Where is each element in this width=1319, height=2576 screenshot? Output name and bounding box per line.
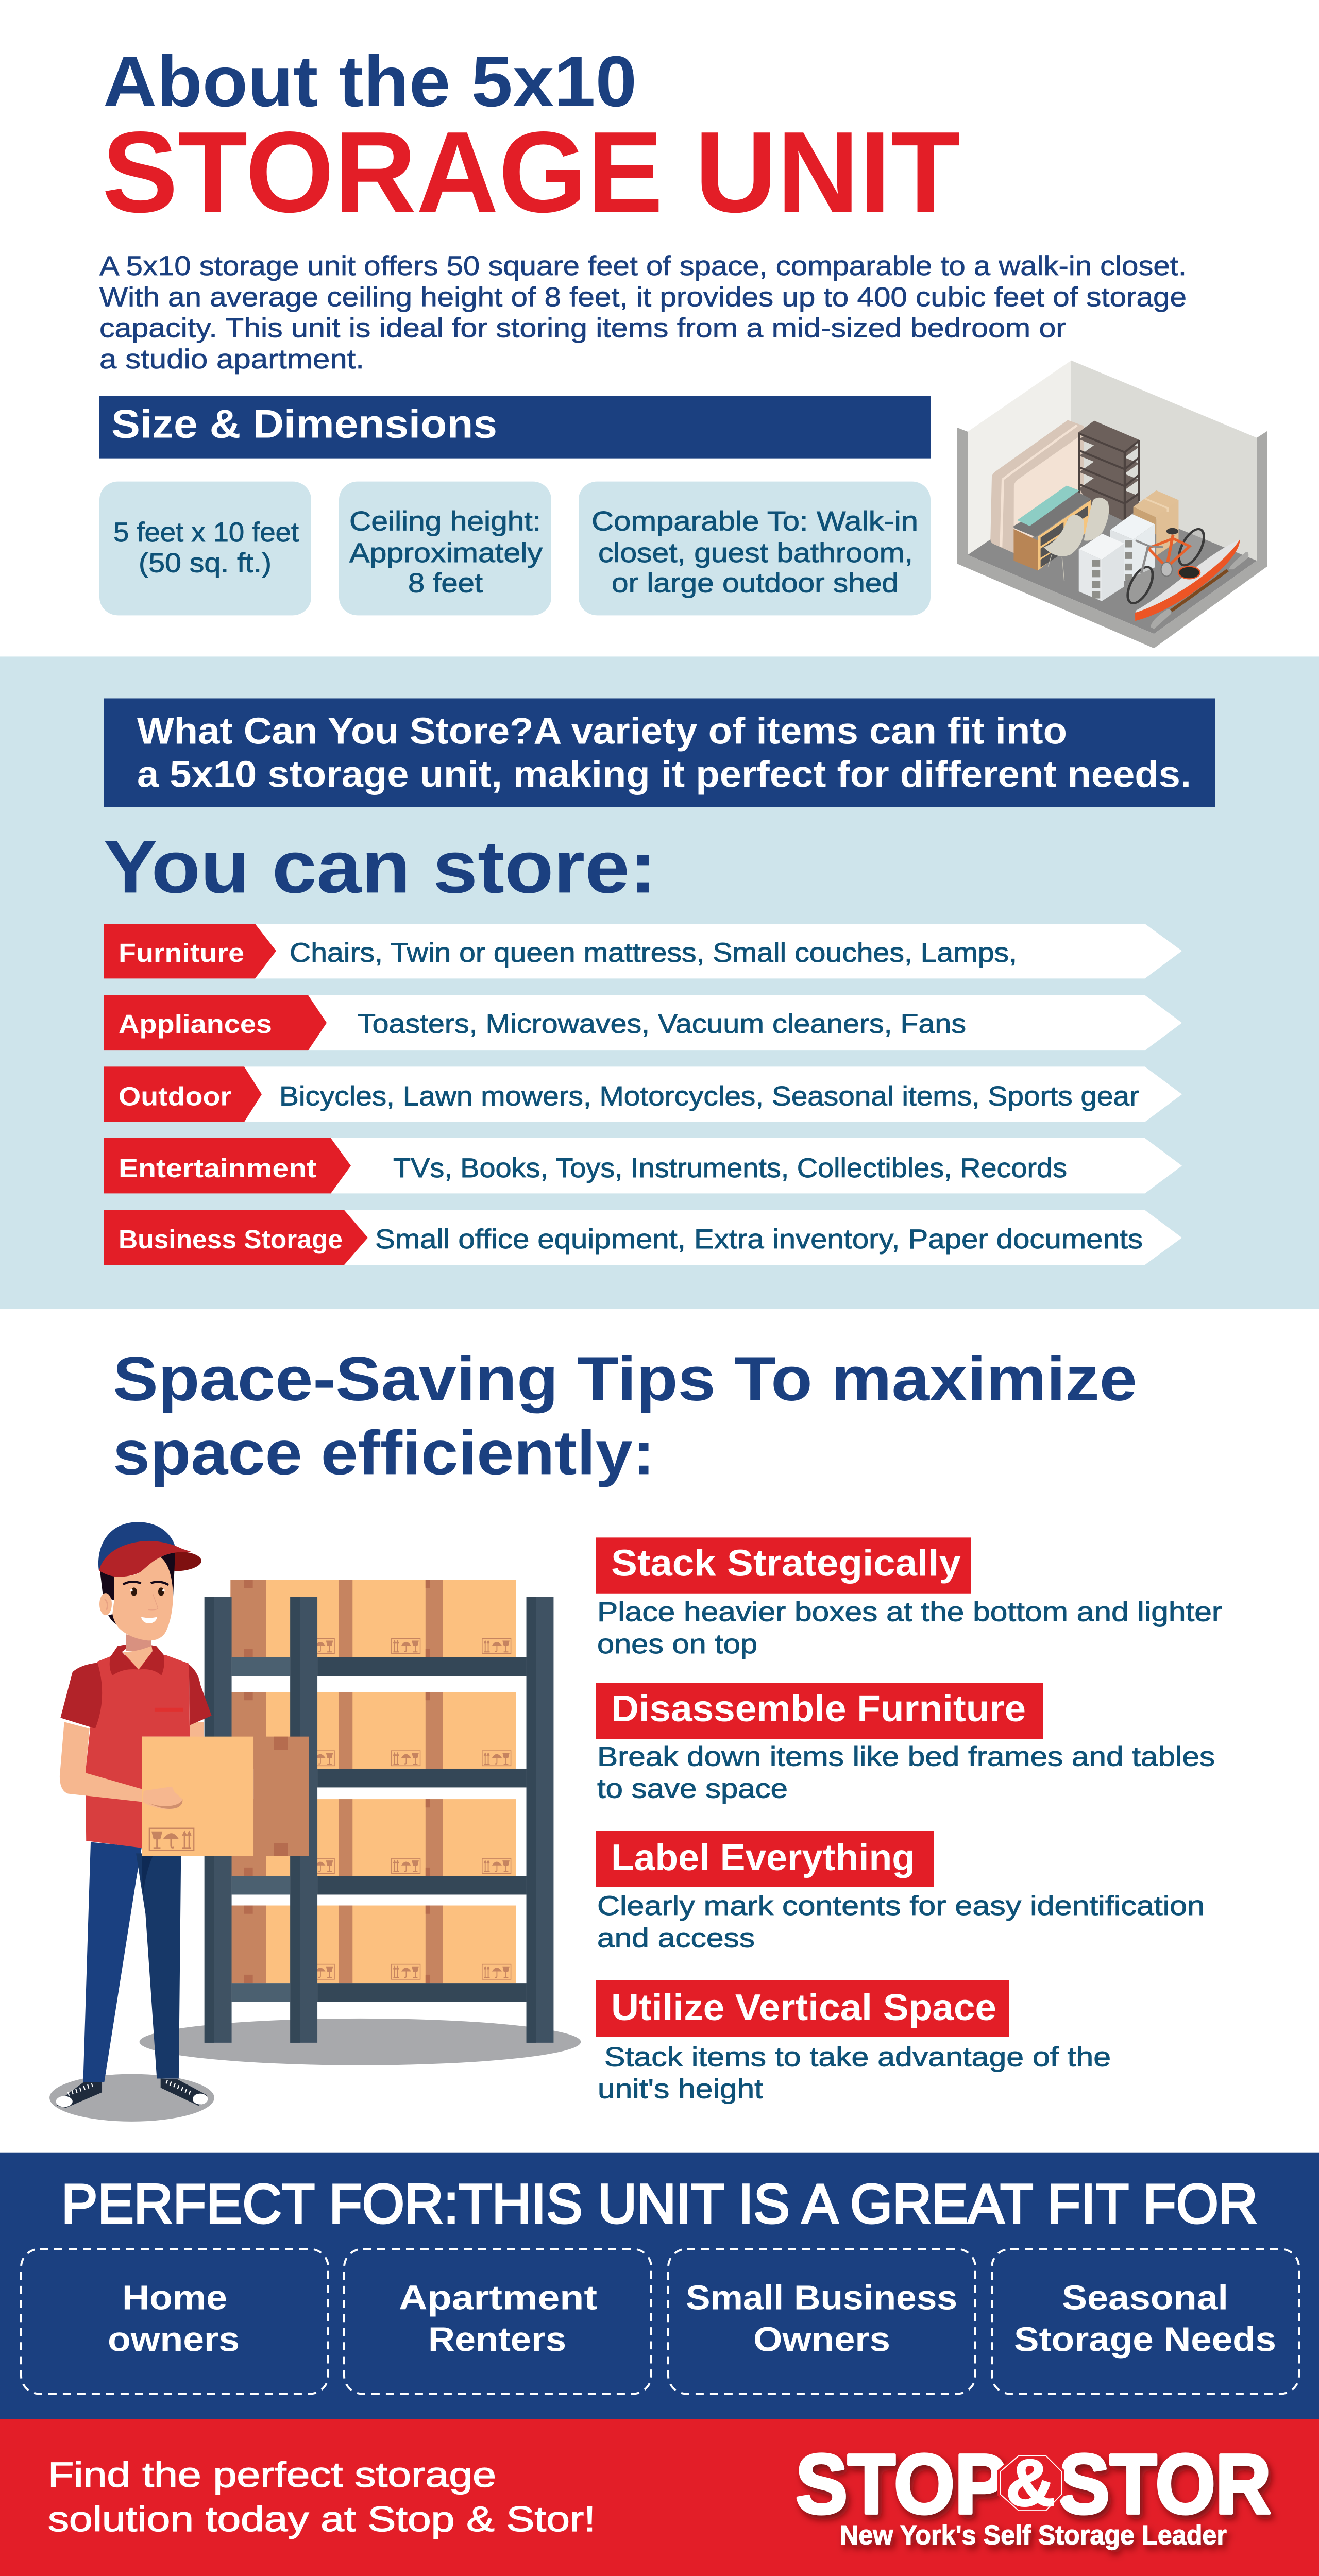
card: home owners: Home: [122, 2279, 227, 2317]
card: comparable to: Comparable To: Walk-in: [591, 506, 918, 536]
banner: what can you store: What Can You Store?A variety of items can fit into: [137, 710, 1067, 752]
tip: label everything: Label Everything: [611, 1837, 915, 1878]
unit walls and floor: [957, 361, 1267, 648]
card: apartment renters: Renters: [428, 2320, 566, 2359]
card: small business owners: Owners: [753, 2320, 890, 2359]
banner: what can you store: a 5x10 storage unit, making it perfect for different needs.: [137, 754, 1191, 795]
row: furniture: [104, 924, 1182, 978]
card: footprint: [99, 482, 311, 615]
tip: stack strategically: Stack Strategically: [611, 1543, 961, 1584]
heading: size and dimensions: [99, 396, 931, 459]
logo: stop and stor: STOP: [796, 2437, 1007, 2532]
card: apartment renters: Apartment: [399, 2279, 597, 2317]
card: comparable to: or large outdoor shed: [612, 568, 899, 598]
card: ceiling height: 8 feet: [408, 568, 483, 598]
title: [102, 41, 960, 236]
tip: label everything: and access: [597, 1923, 755, 1953]
desk with glass shelf: [1013, 485, 1091, 571]
logo: stop and stor: [796, 2437, 1271, 2550]
heading: size and dimensions: Size & Dimensions: [111, 401, 497, 446]
call to action: Find the perfect storage: [48, 2455, 496, 2495]
tip: disassemble furniture: to save space: [597, 1774, 788, 1804]
card: ceiling height: [339, 482, 551, 615]
card: ceiling height: Ceiling height:: [349, 506, 541, 536]
tip: utilize vertical space: Utilize Vertical Space: [611, 1987, 996, 2028]
card: home owners: [21, 2249, 328, 2394]
title: STORAGE UNIT: [102, 108, 960, 236]
heading: space-saving tips: [113, 1344, 1137, 1487]
panel background: [0, 656, 1319, 1309]
row: outdoor: [104, 1066, 1182, 1122]
heading: perfect for: PERFECT FOR:THIS UNIT IS A GREAT FIT FOR: [61, 2174, 1258, 2235]
intro paragraph: [99, 251, 1187, 375]
card: seasonal storage needs: Storage Needs: [1014, 2320, 1276, 2359]
mattress: [990, 420, 1084, 553]
tip: disassemble furniture: Break down items like bed frames and tables: [597, 1742, 1215, 1772]
illustration: isometric storage unit: [957, 361, 1267, 648]
panel: what can you store: [0, 656, 1319, 1309]
row: furniture: Furniture: [119, 938, 244, 968]
tip: utilize vertical space: [596, 1980, 1111, 2104]
illustration: worker and shelves: [49, 1522, 581, 2122]
call to action: [48, 2455, 596, 2539]
card: footprint: (50 sq. ft.): [139, 548, 272, 578]
row: outdoor: Bicycles, Lawn mowers, Motorcycles, Seasonal items, Sports gear: [279, 1081, 1139, 1111]
tip: disassemble furniture: [596, 1683, 1215, 1804]
kayak: [1135, 539, 1248, 629]
card: ceiling height: Approximately: [349, 538, 543, 568]
heading: space-saving tips: Space-Saving Tips To maximize: [113, 1344, 1137, 1413]
panel: perfect for: [0, 2153, 1319, 2419]
chairs: [1043, 498, 1109, 581]
card: home owners: owners: [108, 2320, 240, 2359]
card: comparable to: [579, 482, 931, 615]
card: apartment renters: [344, 2249, 651, 2394]
tip: disassemble furniture: Disassemble Furniture: [611, 1688, 1026, 1730]
logo: stop and stor: STOR: [1058, 2437, 1271, 2532]
panel background: [0, 2153, 1319, 2419]
tip: stack strategically: [596, 1537, 1222, 1659]
worker head: [98, 1522, 201, 1675]
row: entertainment: [104, 1138, 1182, 1193]
worker body: [56, 1655, 212, 2108]
panel: footer: [0, 2419, 1319, 2576]
row: entertainment: TVs, Books, Toys, Instruments, Collectibles, Records: [393, 1154, 1067, 1183]
row: appliances: Appliances: [119, 1009, 272, 1039]
shelf with boxes: [205, 1580, 553, 2043]
tip: label everything: Clearly mark contents for easy identification: [597, 1891, 1205, 1921]
logo: stop and stor: New York's Self Storage Leader: [840, 2520, 1227, 2550]
cardboard box: [1134, 490, 1178, 556]
intro paragraph: capacity. This unit is ideal for storing items from a mid-sized bedroom or: [99, 313, 1066, 343]
row: appliances: Toasters, Microwaves, Vacuum cleaners, Fans: [358, 1009, 966, 1039]
row: business storage: [104, 1210, 1182, 1265]
card: small business owners: Small Business: [686, 2279, 957, 2317]
heading: you can store: You can store:: [104, 825, 656, 908]
row: appliances: [104, 995, 1182, 1050]
tip: utilize vertical space: Stack items to take advantage of the: [604, 2042, 1111, 2073]
held box: [142, 1737, 309, 1856]
banner: what can you store: [104, 698, 1215, 807]
card: seasonal storage needs: [992, 2249, 1299, 2394]
intro paragraph: With an average ceiling height of 8 feet, it provides up to 400 cubic feet of storage: [99, 282, 1187, 313]
row: business storage: Small office equipment, Extra inventory, Paper documents: [375, 1224, 1143, 1255]
icon: stop sign ampersand: &: [1006, 2446, 1055, 2520]
title: About the 5x10: [103, 41, 637, 122]
panel: about the unit: [99, 41, 1267, 648]
card: footprint: 5 feet x 10 feet: [113, 517, 299, 548]
row: outdoor: Outdoor: [119, 1081, 231, 1111]
row: business storage: Business Storage: [119, 1224, 343, 1254]
panel: space-saving tips: [49, 1344, 1222, 2122]
intro paragraph: a studio apartment.: [99, 344, 364, 375]
tip: stack strategically: ones on top: [597, 1630, 757, 1659]
call to action: solution today at Stop & Stor!: [48, 2499, 596, 2539]
card: seasonal storage needs: Seasonal: [1062, 2279, 1228, 2317]
tip: stack strategically: Place heavier boxes at the bottom and lighter: [597, 1597, 1222, 1627]
card: small business owners: [668, 2249, 975, 2394]
footer background: [0, 2419, 1319, 2576]
tip: utilize vertical space: unit's height: [598, 2074, 763, 2104]
row: entertainment: Entertainment: [119, 1154, 316, 1183]
intro paragraph: A 5x10 storage unit offers 50 square feet of space, comparable to a walk-in closet.: [99, 251, 1187, 281]
heading: space-saving tips: space efficiently:: [113, 1418, 655, 1487]
shadows: [49, 2019, 581, 2122]
tip: label everything: [596, 1831, 1205, 1953]
card: comparable to: closet, guest bathroom,: [598, 538, 913, 568]
metal shelving: [1078, 421, 1140, 521]
white boxes: [1079, 514, 1155, 601]
bicycle: [1123, 527, 1209, 606]
row: furniture: Chairs, Twin or queen mattress, Small couches, Lamps,: [290, 938, 1017, 968]
